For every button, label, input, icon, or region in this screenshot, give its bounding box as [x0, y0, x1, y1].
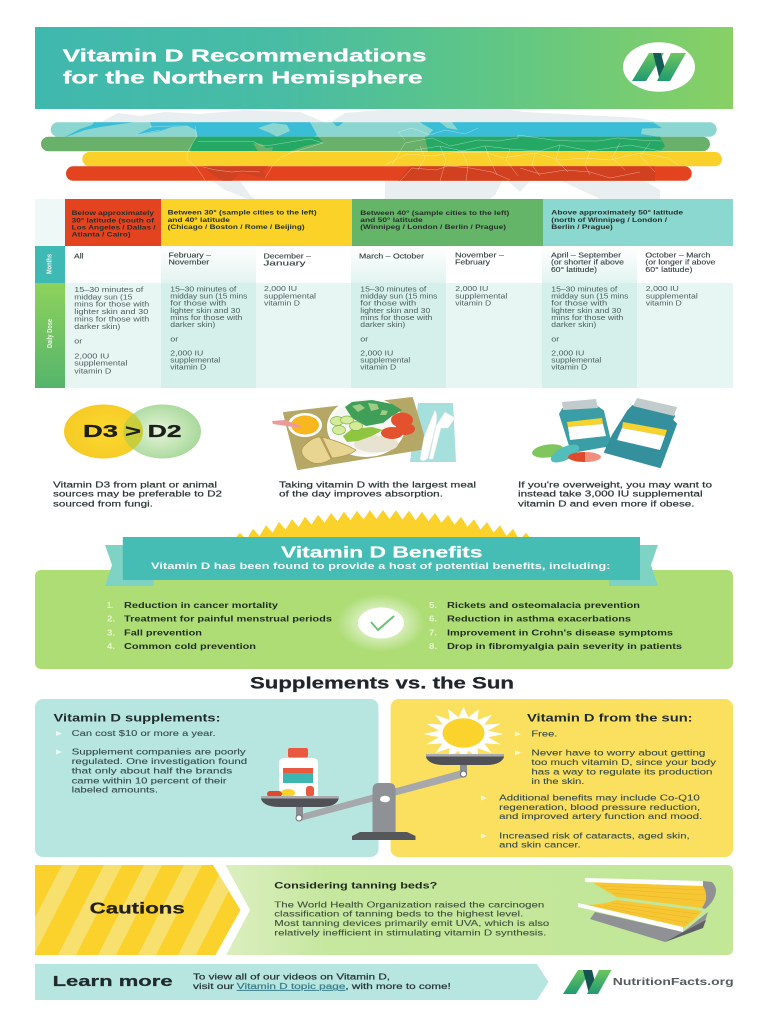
icon: supplement bottles and pills — [531, 398, 677, 467]
daily dose: 30 to 40 degrees, sun months: vitamin D — [170, 365, 206, 372]
tanning text: Most tanning devices primarily emit UVA, which is also — [274, 918, 550, 928]
map: country borders — [136, 126, 680, 181]
daily dose: 40 to 50 degrees, sun months: lighter skin and 30 — [360, 308, 430, 315]
header: 40 to 50 degrees — [352, 199, 543, 246]
icon: NutritionFacts logo badge — [623, 42, 695, 92]
daily dose: above 50 degrees, sun months: midday sun (15 mins — [551, 294, 629, 301]
daily dose: above 50 degrees, sun months — [551, 286, 629, 372]
panel: vitamin D supplements: Vitamin D supplements: — [54, 713, 220, 725]
text: D3 versus D2 caption: Vitamin D3 from plant or animal — [53, 480, 217, 489]
bread — [302, 437, 331, 464]
band: 40 to 50 degrees — [41, 137, 710, 151]
logo: NutritionFacts.org: NutritionFacts.org — [613, 977, 734, 988]
list: benefits 5 to 8: Improvement in Crohn's disease symptoms — [447, 628, 674, 637]
plate — [327, 397, 405, 457]
months row text: All — [74, 253, 84, 260]
title — [63, 45, 427, 87]
right pan — [426, 754, 504, 765]
table corner cell — [35, 199, 65, 246]
panel: vitamin D from the sun: too much vitamin D, since your body — [531, 757, 717, 767]
text: D3 versus D2 caption — [53, 480, 223, 509]
daily dose: above 50 degrees, winter — [646, 286, 698, 308]
daily dose: below 30 degrees: 2,000 IU — [74, 353, 109, 360]
cell backgrounds — [65, 246, 733, 388]
right bottle — [605, 406, 676, 467]
daily dose: below 30 degrees: 15–30 minutes of — [74, 287, 143, 294]
juice — [288, 413, 322, 437]
world map with latitude bands — [41, 110, 722, 199]
left hanger — [296, 804, 303, 818]
daily dose: below 30 degrees: midday sun (15 — [74, 294, 132, 301]
text: overweight caption: If you're overweight, you may want to — [518, 480, 713, 489]
header: 30 to 40 degrees: and 40° latitude — [168, 216, 230, 224]
text: overweight caption — [518, 480, 713, 509]
title: Vitamin D Recommendations — [63, 45, 427, 65]
subheading: Vitamin D has been found to provide a host of potential benefits, including: — [151, 561, 611, 571]
list: benefits 1 to 4: Fall prevention — [124, 628, 202, 637]
list: benefits 5 to 8 — [429, 601, 683, 651]
months row text — [74, 253, 716, 274]
daily dose: below 30 degrees: or — [74, 338, 83, 345]
months row text: December – — [264, 253, 311, 260]
months row text: March – October — [359, 253, 425, 260]
daily dose: 30 to 40 degrees, sun months: lighter skin and 30 — [170, 308, 240, 315]
list: benefits 1 to 4: Treatment for painful menstrual periods — [124, 615, 333, 624]
tray — [284, 398, 427, 469]
row label: daily dose: Daily Dose — [47, 319, 54, 348]
daily dose: above 50 degrees, sun months: lighter skin and 30 — [551, 308, 621, 315]
months row text: (or shorter if above — [551, 260, 624, 267]
band: below 30 degrees — [66, 166, 692, 181]
band: 30 to 40 degrees — [82, 152, 722, 166]
map: grey land masses — [100, 110, 660, 199]
panel: vitamin D from the sun: has a way to regulate its production — [531, 767, 713, 777]
panel: vitamin D supplements: Supplement companies are poorly — [72, 746, 247, 756]
header: 40 to 50 degrees: Between 40° (sample cities to the left) — [360, 209, 509, 217]
tomatoes — [381, 412, 415, 439]
header: below 30 degrees: 30° latitude (south of — [72, 216, 155, 224]
tanning text: classification of tanning beds to the highest level. — [274, 909, 523, 919]
icon: check mark — [337, 594, 425, 652]
months row text: (or longer if above — [645, 260, 716, 267]
header: below 30 degrees: Los Angeles / Dallas / — [72, 224, 156, 231]
text: D3 versus D2 caption: sourced from fungi. — [53, 500, 153, 509]
months row text: February – — [168, 253, 211, 260]
daily dose: 40 to 50 degrees, sun months: darker skin) — [360, 322, 405, 329]
header: below 30 degrees — [65, 199, 161, 246]
daily dose: above 50 degrees, winter: supplemental — [646, 294, 698, 301]
daily dose: 30 to 40 degrees, sun months: 15–30 minutes of — [170, 286, 236, 293]
header banner — [35, 27, 733, 109]
text: largest meal caption: of the day improves absorption. — [279, 490, 443, 499]
panel: vitamin D supplements: regulated. One investigation found — [72, 756, 248, 766]
list: benefits 1 to 4: 1. — [107, 601, 113, 610]
icon: D3 greater than D2 venn diagram — [64, 404, 201, 458]
text: largest meal caption — [279, 480, 476, 499]
panel: vitamin D supplements: Can cost $10 or more a year. — [72, 728, 216, 738]
lamps — [598, 886, 707, 923]
link text — [193, 972, 451, 991]
panel: vitamin D from the sun: Free. — [531, 729, 557, 739]
panel: vitamin D from the sun — [391, 699, 733, 857]
panel: vitamin D from the sun: regeneration, blood pressure reduction, — [499, 802, 700, 812]
list: benefits 5 to 8: Rickets and osteomalacia prevention — [447, 601, 640, 610]
list: benefits 5 to 8: Reduction in asthma exacerbations — [447, 615, 632, 624]
beam — [298, 770, 465, 821]
daily dose: above 50 degrees, sun months: supplemental — [551, 358, 602, 365]
panel: vitamin D from the sun: Additional benefits may include Co-Q10 — [499, 792, 700, 802]
daily dose: 40 to 50 degrees, sun months: for those with — [360, 301, 416, 308]
daily dose: above 50 degrees, winter: vitamin D — [646, 301, 682, 308]
header: 30 to 40 degrees: Between 30° (sample cities to the left) — [168, 209, 317, 217]
daily dose: 30 to 40 degrees, sun months: mins for those with — [170, 315, 242, 322]
header: 40 to 50 degrees: and 50° latitude — [360, 216, 423, 224]
daily dose: 40 to 50 degrees, winter: vitamin D — [455, 301, 491, 308]
striped arrow — [26, 865, 242, 955]
list: benefits 5 to 8: 6. — [429, 615, 437, 624]
daily dose: below 30 degrees: vitamin D — [74, 368, 111, 375]
pills — [531, 442, 565, 460]
months row text: 60° latitude) — [551, 266, 597, 274]
header: below 30 degrees: Atlanta / Cairo) — [72, 231, 131, 238]
header: 40 to 50 degrees: (Winnipeg / London / Berlin / Prague) — [360, 224, 506, 231]
list: benefits 1 to 4 — [107, 601, 333, 651]
panel: vitamin D from the sun: Increased risk of cataracts, aged skin, — [499, 830, 690, 840]
link text: visit our — [193, 982, 234, 991]
row label: months: Months — [46, 254, 54, 274]
daily dose: 30 to 40 degrees, sun months: supplemental — [170, 358, 221, 365]
daily dose: 30 to 40 degrees, winter: 2,000 IU — [264, 286, 297, 293]
text: largest meal caption: Taking vitamin D with the largest meal — [279, 480, 476, 489]
text: overweight caption: instead take 3,000 IU supplemental — [518, 490, 703, 499]
ribbon — [105, 537, 658, 586]
icon: D3 greater than D2 venn diagram: D2 — [148, 421, 182, 441]
daily dose: 40 to 50 degrees, sun months — [360, 286, 438, 372]
header: above 50 degrees: Above approximately 50° latitude — [551, 209, 683, 217]
daily dose: below 30 degrees: lighter skin and 30 — [74, 309, 148, 316]
panel: vitamin D from the sun: and improved artery function and mood. — [499, 811, 702, 821]
icon: meal on a tray — [272, 397, 456, 469]
daily dose: 40 to 50 degrees, winter: supplemental — [455, 294, 508, 301]
logo: NutritionFacts.org — [563, 970, 734, 994]
months row text: 60° latitude) — [645, 266, 692, 274]
sunburst behind ribbon — [227, 510, 539, 540]
panel: vitamin D from the sun: Vitamin D from the sun: — [527, 713, 693, 725]
daily dose: above 50 degrees, sun months: 15–30 minutes of — [551, 286, 617, 293]
row label: months — [35, 246, 65, 283]
header: 30 to 40 degrees — [161, 199, 352, 246]
rice — [354, 436, 398, 452]
left bottle — [560, 407, 611, 452]
daily dose: below 30 degrees: mins for those with — [74, 302, 149, 309]
panel: vitamin D from the sun: in the skin. — [531, 776, 584, 786]
daily dose: above 50 degrees, sun months: darker skin) — [551, 322, 596, 329]
pill bottle — [267, 748, 318, 797]
months row text: October – March — [645, 253, 711, 260]
header: above 50 degrees: (north of Winnipeg / London / — [551, 217, 667, 224]
header: 30 to 40 degrees: (Chicago / Boston / Rome / Beijing) — [168, 224, 305, 231]
daily dose: below 30 degrees: mins for those with — [74, 316, 149, 323]
salad greens — [345, 400, 402, 426]
panel: vitamin D from the sun: Never have to worry about getting — [531, 747, 706, 757]
panel: vitamin D supplements — [35, 699, 378, 857]
months row text: November – — [455, 253, 504, 260]
icon: tanning bed — [578, 878, 716, 942]
panel: vitamin D from the sun: and skin cancer. — [499, 840, 581, 850]
months row text: January — [264, 260, 306, 267]
daily dose: 30 to 40 degrees, sun months: darker skin) — [170, 322, 215, 329]
daily dose: 40 to 50 degrees, winter — [455, 286, 508, 308]
daily dose: 30 to 40 degrees, sun months — [170, 286, 248, 372]
list: benefits 1 to 4: Common cold prevention — [124, 642, 256, 651]
row label: daily dose — [35, 283, 65, 388]
panel: vitamin D benefits — [35, 510, 733, 669]
daily dose: 40 to 50 degrees, sun months: or — [360, 336, 369, 343]
link text: , with more to come! — [345, 982, 451, 991]
daily dose: 30 to 40 degrees, sun months: for those with — [170, 301, 226, 308]
lid interior — [592, 882, 708, 908]
months row text: February — [455, 260, 491, 267]
daily dose: above 50 degrees, sun months: or — [551, 336, 560, 343]
header: below 30 degrees: Below approximately — [72, 210, 154, 217]
daily dose: 30 to 40 degrees, sun months: or — [170, 336, 179, 343]
panel: vitamin D supplements: came within 10 percent of their — [72, 775, 227, 785]
recommendation table — [35, 199, 733, 388]
list: benefits 1 to 4: 4. — [107, 642, 115, 651]
months row text: November — [168, 260, 210, 267]
green content band — [226, 865, 733, 955]
daily dose: 40 to 50 degrees, sun months: mins for those with — [360, 315, 432, 322]
right hanger — [460, 762, 467, 774]
panel: learn more: Learn more — [53, 973, 173, 990]
base — [590, 912, 708, 942]
title: for the Northern Hemisphere — [63, 67, 423, 87]
daily dose: above 50 degrees, sun months: mins for those with — [551, 315, 623, 322]
panel: cautions — [26, 865, 733, 955]
daily dose: 40 to 50 degrees, winter: 2,000 IU — [455, 286, 488, 293]
daily dose: below 30 degrees — [74, 287, 149, 375]
panel: vitamin D supplements: labeled amounts. — [72, 785, 158, 795]
cucumbers — [330, 416, 362, 434]
bed interior — [587, 900, 702, 928]
daily dose: 30 to 40 degrees, sun months: midday sun (15 mins — [170, 294, 248, 301]
daily dose: below 30 degrees: darker skin) — [74, 324, 120, 331]
text: overweight caption: vitamin D and even more if obese. — [518, 500, 694, 509]
bullets — [56, 731, 62, 754]
text: D3 versus D2 caption: sources may be preferable to D2 — [53, 490, 223, 499]
icon: D3 greater than D2 venn diagram: > — [125, 421, 141, 441]
left pan — [261, 796, 339, 807]
list: benefits 5 to 8: Drop in fibromyalgia pain severity in patients — [447, 642, 683, 651]
list: benefits 5 to 8: 8. — [429, 642, 437, 651]
tanning text: The World Health Organization raised the carcinogen — [274, 899, 545, 909]
months row text: April – September — [551, 253, 622, 260]
daily dose: 40 to 50 degrees, sun months: supplemental — [360, 358, 411, 365]
daily dose: 40 to 50 degrees, sun months: 2,000 IU — [360, 351, 393, 358]
icon: D3 greater than D2 venn diagram: D3 — [83, 421, 118, 441]
daily dose: 40 to 50 degrees, sun months: vitamin D — [360, 365, 396, 372]
daily dose: 30 to 40 degrees, sun months: 2,000 IU — [170, 351, 203, 358]
daily dose: 30 to 40 degrees, winter: vitamin D — [264, 301, 300, 308]
list: benefits 1 to 4: Reduction in cancer mortality — [124, 601, 279, 610]
daily dose: above 50 degrees, sun months: vitamin D — [551, 365, 587, 372]
green list panel — [35, 570, 733, 669]
daily dose: above 50 degrees, winter: 2,000 IU — [646, 286, 679, 293]
list: benefits 5 to 8: 5. — [429, 601, 437, 610]
list: benefits 1 to 4: 2. — [107, 615, 115, 624]
bullets — [481, 732, 521, 838]
band: above 50 degrees — [51, 122, 717, 138]
link text: Vitamin D topic page — [237, 982, 346, 991]
daily dose: 30 to 40 degrees, winter: supplemental — [264, 294, 317, 301]
header: above 50 degrees — [543, 199, 733, 246]
daily dose: below 30 degrees: supplemental — [74, 361, 128, 368]
post — [372, 783, 396, 833]
tanning text: relatively inefficient in stimulating vitamin D synthesis. — [274, 927, 546, 937]
list: benefits 5 to 8: 7. — [429, 628, 437, 637]
daily dose: above 50 degrees, sun months: for those with — [551, 301, 607, 308]
daily dose: above 50 degrees, sun months: 2,000 IU — [551, 351, 584, 358]
daily dose: 30 to 40 degrees, winter — [264, 286, 317, 308]
header: above 50 degrees: Berlin / Prague) — [551, 224, 613, 231]
daily dose: 40 to 50 degrees, sun months: midday sun (15 mins — [360, 294, 438, 301]
tanning text — [274, 880, 550, 937]
panel: learn more — [35, 964, 549, 1000]
daily dose: 40 to 50 degrees, sun months: 15–30 minutes of — [360, 286, 426, 293]
napkin — [410, 403, 456, 462]
heading: supplements vs the sun: Supplements vs. the Sun — [250, 674, 514, 692]
tanning text: Considering tanning beds? — [274, 880, 438, 890]
cutlery — [420, 410, 437, 461]
heading: Vitamin D Benefits — [281, 544, 483, 561]
cautions label: Cautions — [90, 901, 185, 918]
list: benefits 1 to 4: 3. — [107, 628, 115, 637]
icon: balance scale weighing bottle against sun — [261, 707, 504, 840]
sun — [424, 707, 504, 761]
panel: vitamin D supplements: that only about half the brands — [72, 766, 232, 776]
link text: To view all of our videos on Vitamin D, — [193, 972, 390, 981]
